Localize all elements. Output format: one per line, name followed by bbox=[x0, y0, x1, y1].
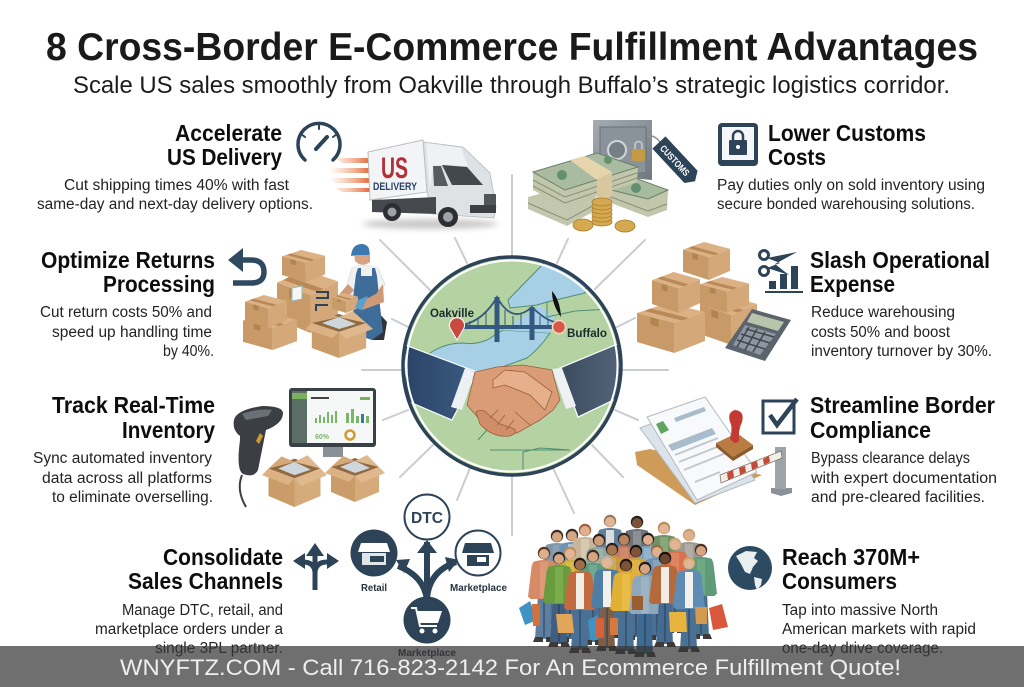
body text: to eliminate overselling. bbox=[52, 489, 213, 506]
body text: Cut shipping times 40% with fast bbox=[64, 177, 290, 194]
body text bbox=[782, 602, 976, 657]
right suit sleeve bbox=[560, 343, 620, 417]
stamp bbox=[716, 433, 753, 457]
heading: Streamline Border bbox=[810, 392, 995, 418]
body text: Sync automated inventory bbox=[33, 450, 212, 467]
worker bbox=[372, 312, 387, 340]
footer banner bbox=[0, 646, 1024, 687]
heading: Expense bbox=[810, 271, 895, 297]
channel: Marketplace storefront: Marketplace bbox=[450, 582, 507, 594]
panel: Accelerate US Delivery bbox=[37, 120, 498, 229]
diagram: sales channels bbox=[350, 494, 507, 659]
heading: US Delivery bbox=[167, 144, 282, 170]
body text: data across all platforms bbox=[42, 470, 212, 487]
heading bbox=[41, 247, 215, 297]
channel: Marketplace cart bbox=[398, 596, 456, 659]
customs tag: CUSTOMS bbox=[657, 143, 691, 179]
heading: Accelerate bbox=[175, 120, 282, 146]
illustration: crowd of shoppers bbox=[519, 515, 728, 657]
body text: secure bonded warehousing solutions. bbox=[717, 196, 975, 213]
panel: Lower Customs Costs bbox=[528, 120, 985, 232]
illustration: barcode scanner bbox=[234, 406, 283, 507]
heading: Consumers bbox=[782, 568, 897, 594]
left suit sleeve bbox=[405, 345, 477, 420]
body text: same-day and next-day delivery options. bbox=[37, 196, 313, 213]
truck label: US bbox=[381, 152, 408, 185]
body text: speed up handling time bbox=[52, 324, 212, 341]
heading: Optimize Returns bbox=[41, 247, 215, 273]
body text: by 40%. bbox=[163, 343, 214, 360]
body text: one-day drive coverage. bbox=[782, 640, 943, 657]
pin: Buffalo bbox=[552, 320, 566, 334]
footer banner: WNYFTZ.COM - Call 716-823-2142 For An Ecommerce Fulfillment Quote! bbox=[120, 655, 901, 680]
illustration: box pile and calculator bbox=[637, 242, 791, 361]
barrier bbox=[771, 488, 792, 496]
heading bbox=[128, 544, 283, 594]
illustration: inventory dashboard monitor bbox=[289, 388, 376, 457]
calculator bbox=[725, 309, 791, 361]
body text: American markets with rapid bbox=[782, 621, 976, 638]
icon: globe bbox=[728, 546, 772, 590]
body text: single 3PL partner. bbox=[155, 640, 283, 657]
channel: Retail bbox=[350, 530, 398, 594]
body text: Bypass clearance delays bbox=[811, 450, 970, 467]
channel: DTC bbox=[404, 494, 450, 540]
icon: splitting arrows bbox=[293, 543, 339, 590]
heading bbox=[810, 392, 995, 443]
title: 8 Cross-Border E-Commerce Fulfillment Advantages bbox=[46, 26, 978, 69]
channel: DTC: DTC bbox=[411, 510, 443, 527]
heading: Compliance bbox=[810, 417, 931, 443]
body text bbox=[811, 304, 992, 360]
heading: Processing bbox=[103, 271, 215, 297]
icon: return arrow bbox=[228, 248, 264, 283]
panel: Streamline Border Compliance bbox=[635, 392, 997, 506]
shirt cuffs bbox=[451, 368, 576, 410]
body text: Cut return costs 50% and bbox=[40, 304, 212, 321]
central circle: handshake over Oakville to Buffalo map bbox=[403, 257, 621, 475]
icon: scissors and bar chart bbox=[760, 250, 803, 293]
heading: Inventory bbox=[122, 417, 215, 443]
heading: Sales Channels bbox=[128, 568, 283, 594]
label: Oakville: Oakville bbox=[430, 306, 474, 320]
body text: inventory turnover by 30%. bbox=[811, 343, 992, 360]
body text bbox=[37, 177, 313, 213]
panel: Slash Operational Expense bbox=[637, 242, 992, 361]
body text: Tap into massive North bbox=[782, 602, 938, 619]
illustration: documents, stamp and barrier bbox=[635, 397, 792, 505]
heading: Lower Customs bbox=[768, 120, 926, 146]
customs tag bbox=[652, 136, 702, 187]
map water bbox=[430, 262, 610, 470]
label: Buffalo: Buffalo bbox=[567, 326, 607, 340]
body text bbox=[717, 177, 985, 213]
heading bbox=[810, 247, 990, 297]
body text bbox=[95, 602, 283, 657]
body text: and pre-cleared facilities. bbox=[811, 489, 985, 506]
body text: Manage DTC, retail, and bbox=[122, 602, 283, 619]
illustration: delivery truck: DELIVERY bbox=[373, 181, 418, 193]
body text bbox=[810, 450, 997, 506]
feather marker bbox=[552, 291, 561, 317]
channel: Retail: Retail bbox=[361, 582, 387, 594]
heading: Slash Operational bbox=[810, 247, 990, 273]
body text: Reduce warehousing bbox=[811, 304, 955, 321]
channel: Marketplace cart: Marketplace bbox=[398, 647, 456, 659]
bridge bbox=[463, 297, 555, 342]
subtitle: Scale US sales smoothly from Oakville through Buffalo’s strategic logistics corridor. bbox=[73, 72, 950, 99]
body text bbox=[40, 304, 214, 360]
panel: Optimize Returns Processing bbox=[40, 244, 387, 360]
icon: speedometer bbox=[298, 123, 340, 160]
heading bbox=[768, 120, 926, 170]
body text: marketplace orders under a bbox=[95, 621, 283, 638]
body text bbox=[33, 450, 213, 506]
illustration: worker and return boxes bbox=[243, 244, 387, 358]
heading: Reach 370M+ bbox=[782, 544, 920, 570]
body text: costs 50% and boost bbox=[811, 324, 951, 341]
panel: Consolidate Sales Channels bbox=[95, 494, 507, 659]
icon: checkbox bbox=[763, 399, 797, 433]
clasped hands bbox=[467, 365, 560, 436]
heading bbox=[167, 120, 282, 170]
icon: lock bbox=[718, 123, 758, 166]
body text: with expert documentation bbox=[810, 470, 997, 487]
money stacks bbox=[528, 180, 600, 226]
illustration: delivery truck bbox=[328, 140, 498, 229]
illustration: safe, money and coins bbox=[528, 120, 702, 232]
illustration: open boxes bbox=[262, 455, 385, 507]
channel: Marketplace storefront bbox=[450, 530, 507, 594]
body text: Pay duties only on sold inventory using bbox=[717, 177, 985, 194]
panel: Reach 370M+ Consumers bbox=[519, 515, 976, 657]
heading: Consolidate bbox=[163, 544, 283, 570]
illustration: inventory dashboard monitor: 60% bbox=[315, 434, 330, 441]
heading bbox=[52, 392, 215, 443]
pin: Oakville bbox=[450, 318, 464, 340]
heading bbox=[782, 544, 920, 594]
heading: Costs bbox=[768, 144, 826, 170]
panel: Track Real-Time Inventory bbox=[33, 388, 385, 507]
heading: Track Real-Time bbox=[52, 392, 215, 418]
